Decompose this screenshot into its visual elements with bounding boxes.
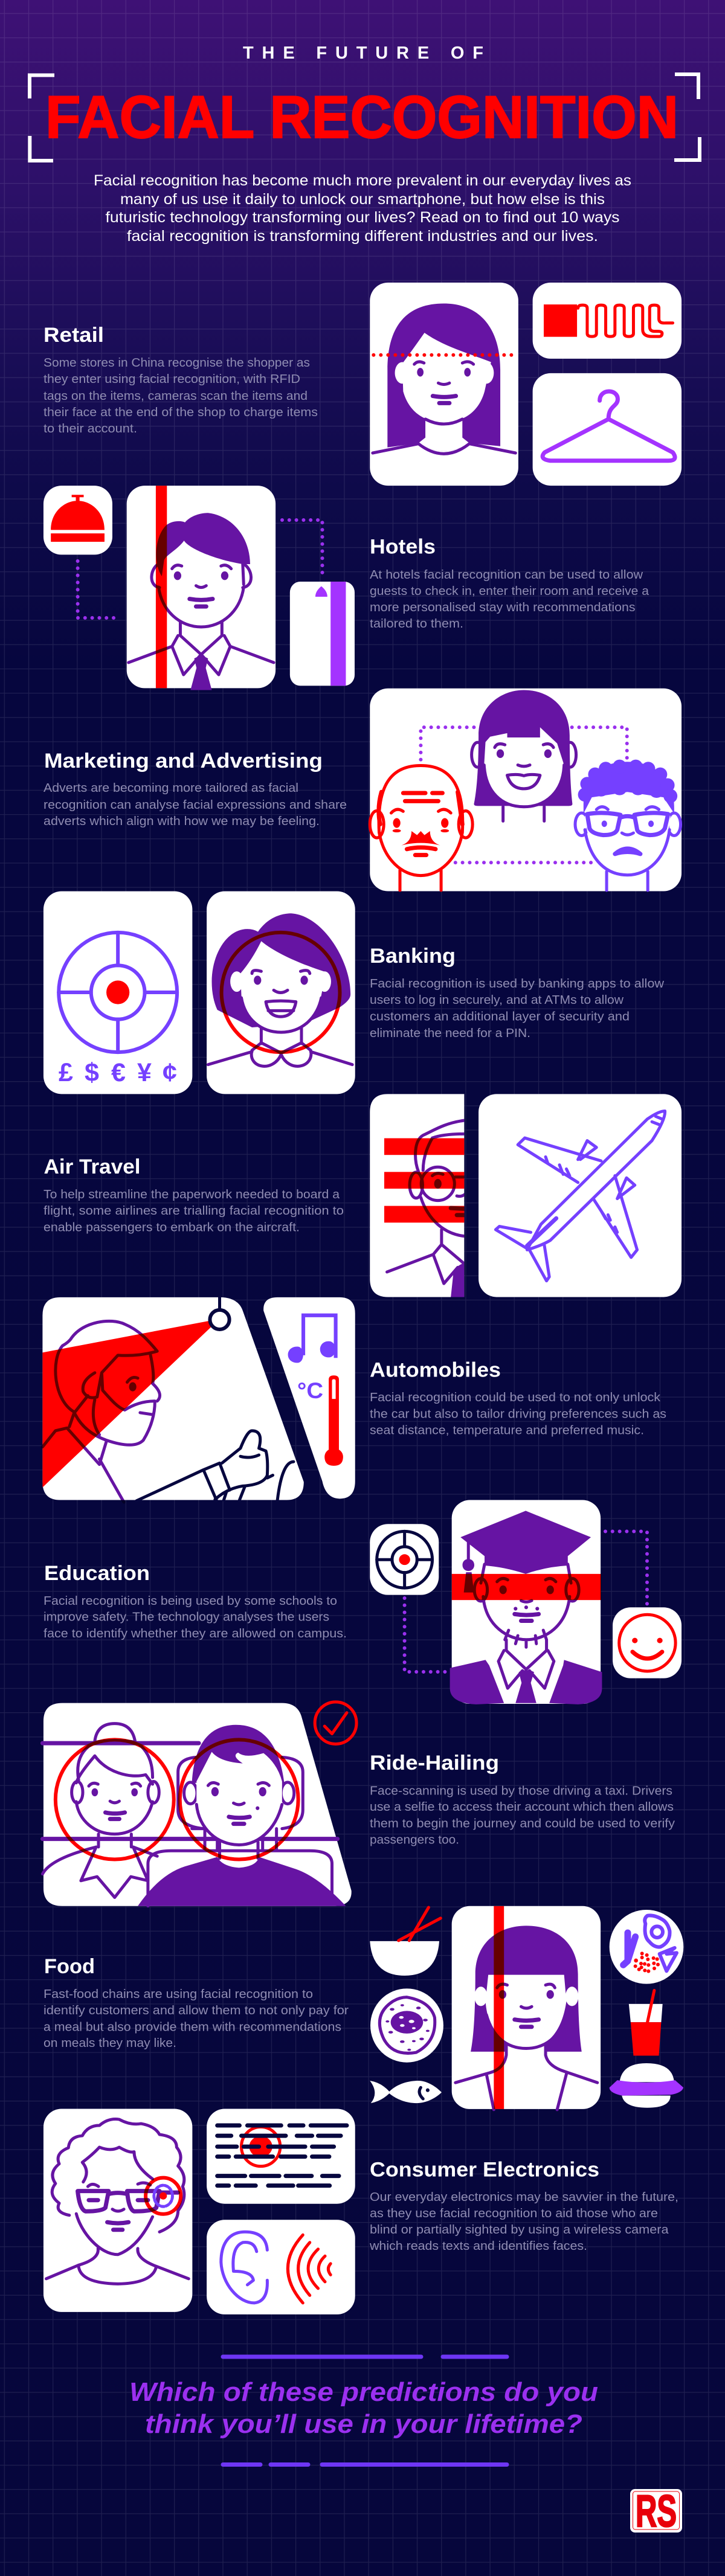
text: retail: their face at the end of the shop to charge items — [44, 406, 318, 419]
heading: retail: Retail — [44, 324, 104, 347]
text: air travel: flight, some airlines are trialling facial recognition to — [44, 1204, 344, 1218]
connector: student to smiley — [605, 1532, 647, 1607]
text: consumer electronics: as they use facial recognition to aid those who are — [370, 2207, 658, 2220]
text: hotels: guests to check in, enter their room and receive a — [370, 585, 649, 598]
face scan ellipses — [56, 1739, 298, 1860]
connector: target to student — [405, 1598, 448, 1672]
text: retail: they enter using facial recognition, with RFID — [44, 373, 300, 386]
icon: soft drink — [629, 1991, 663, 2056]
text: retail — [44, 356, 318, 435]
icon: verified check — [315, 1702, 356, 1744]
text: education — [44, 1595, 347, 1640]
logo: RS — [630, 2486, 682, 2536]
passenger: woman — [42, 1724, 159, 1897]
panel: rfid tag — [533, 283, 682, 359]
panel: passenger scan — [370, 1094, 467, 1297]
text: banking: customers an additional layer of security and — [370, 1010, 630, 1023]
heading: air travel: Air Travel — [44, 1155, 140, 1178]
icon: breakfast plate — [610, 1910, 683, 1984]
panel: smiley — [613, 1607, 682, 1678]
text: automobiles: Facial recognition could be used to not only unlock — [370, 1391, 661, 1404]
text: automobiles: the car but also to tailor driving preferences such as — [370, 1407, 666, 1421]
panel: music and temperature — [263, 1297, 355, 1498]
text: education: face to identify whether they are allowed on campus. — [44, 1627, 347, 1640]
heading: education: Education — [44, 1562, 150, 1585]
text: hotels — [370, 568, 649, 631]
text: education: improve safety. The technology analyses the users — [44, 1611, 329, 1624]
text: ride-hailing: use a selfie to access their account which then allows — [370, 1800, 674, 1814]
text: ride-hailing: passengers too. — [370, 1834, 459, 1847]
focus brackets — [30, 74, 700, 161]
header — [30, 43, 700, 245]
question text: Which of these predictions do you — [129, 2377, 598, 2407]
panel: banking customer — [207, 891, 355, 1094]
bottom rule — [223, 2462, 507, 2467]
text: food: a meal but also provide them with recommendations — [44, 2021, 341, 2034]
panel: diner — [452, 1906, 601, 2110]
icon: pizza — [370, 1988, 443, 2063]
panel: three faces — [370, 689, 682, 891]
section: retail — [44, 283, 682, 486]
heading: food: Food — [44, 1955, 95, 1978]
panel: driver scan — [42, 1297, 304, 1502]
text: consumer electronics — [369, 2191, 678, 2253]
face: smiling woman — [472, 690, 576, 821]
text: ride-hailing: Face-scanning is used by those driving a taxi. Drivers — [370, 1784, 672, 1797]
intro text: many of us use it daily to unlock our smartphone, but how else is this — [120, 191, 605, 208]
panel: hanger — [533, 373, 682, 486]
section: banking — [44, 891, 665, 1094]
kicker: the future of: THE FUTURE OF — [243, 43, 483, 63]
question text — [129, 2377, 598, 2439]
connector: bell to guest — [78, 561, 120, 618]
title: FACIAL RECOGNITION — [45, 83, 678, 150]
question text: think you’ll use in your lifetime? — [145, 2409, 582, 2439]
text: retail: tags on the items, cameras scan the items and — [44, 390, 308, 403]
text: food: on meals they may like. — [44, 2037, 176, 2050]
text: marketing: Adverts are becoming more tailored as facial — [44, 782, 298, 795]
section: hotels — [44, 486, 649, 690]
heading: hotels: Hotels — [370, 536, 436, 559]
text: food — [44, 1988, 349, 2050]
text: banking: eliminate the need for a PIN. — [370, 1027, 530, 1040]
text: ride-hailing — [370, 1784, 675, 1847]
panel: document reader — [207, 2109, 355, 2204]
panel: security dial — [44, 891, 192, 1094]
section: education — [44, 1500, 682, 1704]
text: air travel — [44, 1188, 344, 1235]
heading: marketing: Marketing and Advertising — [44, 750, 323, 772]
text: automobiles — [370, 1391, 666, 1437]
intro text: facial recognition is transforming different industries and our lives. — [127, 228, 598, 245]
icon: noodle bowl — [370, 1907, 440, 1976]
heading: ride-hailing: Ride-Hailing — [370, 1752, 499, 1775]
icon: thermometer — [324, 1375, 343, 1466]
panel: wearable camera user — [44, 2109, 192, 2312]
logo: RS: RS — [636, 2486, 677, 2536]
section: air travel — [44, 1094, 682, 1297]
face: curly-haired man — [575, 760, 681, 890]
icon: fish — [370, 2081, 442, 2103]
panel: audio output — [207, 2220, 355, 2314]
face: older man — [370, 765, 472, 890]
panel: hotel guest — [127, 486, 276, 690]
top rule — [223, 2354, 507, 2359]
text: banking: Facial recognition is used by banking apps to allow — [370, 977, 665, 991]
text: air travel: To help streamline the paperwork needed to board a — [44, 1188, 340, 1201]
icon: burger — [610, 2063, 683, 2108]
heading: automobiles: Automobiles — [370, 1359, 501, 1382]
text: retail: Some stores in China recognise the shopper as — [44, 356, 310, 370]
text: hotels: more personalised stay with recommendations — [370, 601, 636, 614]
panel: hotel bell — [44, 486, 112, 554]
panel: retail shopper — [370, 283, 518, 486]
section: ride-hailing — [42, 1702, 675, 1906]
text: consumer electronics: Our everyday electronics may be savvier in the future, — [370, 2191, 678, 2204]
panel: scan target — [370, 1524, 439, 1595]
text: ride-hailing: them to begin the journey and could be used to verify — [370, 1817, 675, 1830]
text: food: identify customers and allow them to not only pay for — [44, 2004, 349, 2017]
closing question — [129, 2357, 598, 2464]
heading: banking: Banking — [370, 945, 456, 968]
section: consumer electronics — [44, 2109, 678, 2314]
intro text: futuristic technology transforming our lives? Read on to find out 10 ways — [105, 209, 620, 226]
panel: key card — [290, 582, 355, 686]
text: retail: to their account. — [44, 422, 137, 435]
panel: graduate — [450, 1500, 602, 1704]
passenger: driver — [138, 1725, 346, 1906]
icon: music note — [288, 1314, 338, 1363]
connectors between faces — [420, 727, 627, 862]
text: automobiles: seat distance, temperature and preferred music. — [370, 1424, 644, 1437]
icon: currency symbols: £$€¥¢ — [59, 1058, 177, 1087]
intro text — [94, 172, 631, 245]
panel: airplane — [478, 1094, 682, 1297]
text: hotels: tailored to them. — [370, 617, 463, 631]
panel: taxi occupants — [42, 1703, 352, 1906]
heading: consumer electronics: Consumer Electronics — [370, 2159, 599, 2182]
text: marketing: recognition can analyse facial expressions and share — [44, 798, 347, 812]
text: marketing — [44, 782, 347, 828]
connector: guest to key card — [282, 520, 323, 574]
text: hotels: At hotels facial recognition can be used to allow — [370, 568, 643, 582]
section: automobiles — [42, 1297, 666, 1502]
text: marketing: adverts which align with how we may be feeling. — [44, 815, 320, 828]
text: consumer electronics: which reads texts and identifies faces. — [369, 2240, 587, 2253]
section: food — [44, 1906, 683, 2110]
text: consumer electronics: blind or partially sighted by using a wireless camera — [370, 2223, 669, 2237]
text: air travel: enable passengers to embark on the aircraft. — [44, 1221, 300, 1235]
icon: degrees celsius: °C — [297, 1378, 323, 1403]
intro text: Facial recognition has become much more prevalent in our everyday lives as — [94, 172, 631, 189]
text: food: Fast-food chains are using facial recognition to — [44, 1988, 313, 2001]
text: banking: users to log in securely, and at ATMs to allow — [370, 994, 624, 1007]
section: marketing and advertising — [44, 689, 682, 891]
text: banking — [370, 977, 665, 1040]
text: education: Facial recognition is being used by some schools to — [44, 1595, 337, 1608]
